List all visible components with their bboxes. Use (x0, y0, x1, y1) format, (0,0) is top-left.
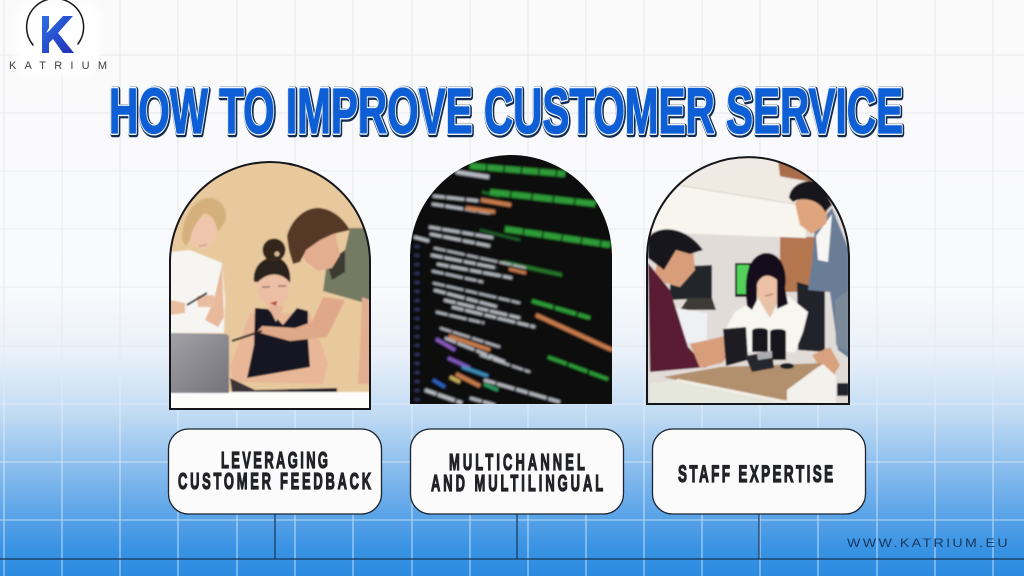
label card: multichannel and multilingual: MULTICHANNEL (449, 450, 585, 476)
white code lines (425, 172, 560, 405)
connector lines (0, 514, 1024, 559)
logo ring (27, 0, 84, 45)
photo panel: program code on screen (405, 150, 617, 410)
label card: multichannel and multilingual: AND MULTILINGUAL (431, 471, 603, 497)
label card: leveraging customer feedback: LEVERAGING (221, 448, 328, 474)
right man (789, 181, 849, 378)
seated woman (724, 253, 808, 352)
photo panel: colleagues with cameras (642, 152, 854, 410)
website url: WWW.KATRIUM.EU (847, 536, 1010, 550)
dark chair (797, 282, 825, 352)
logo letter K (42, 16, 74, 53)
table and cameras (650, 327, 849, 410)
label card: multichannel and multilingual (410, 429, 624, 514)
woman in black (230, 238, 328, 384)
orange code lines (449, 200, 612, 386)
laptop and desk (171, 390, 369, 408)
photo panel: team around laptop (165, 158, 375, 413)
gutter (414, 245, 420, 402)
green code lines (470, 166, 610, 380)
label card: staff expertise (652, 429, 866, 514)
woman in white (170, 198, 226, 333)
label card: leveraging customer feedback (168, 429, 382, 514)
left man (648, 229, 733, 372)
brick wall (778, 162, 812, 183)
label card: staff expertise: STAFF EXPERTISE (678, 461, 833, 488)
logo wordmark: KATRIUM (9, 60, 107, 72)
monitors (670, 265, 712, 300)
purple and blue code lines (433, 339, 498, 390)
white cabinet (650, 185, 806, 238)
man in olive shirt (232, 208, 372, 384)
logo: Katrium (9, 0, 107, 76)
label card: leveraging customer feedback: CUSTOMER FEEDBACK (178, 469, 371, 495)
